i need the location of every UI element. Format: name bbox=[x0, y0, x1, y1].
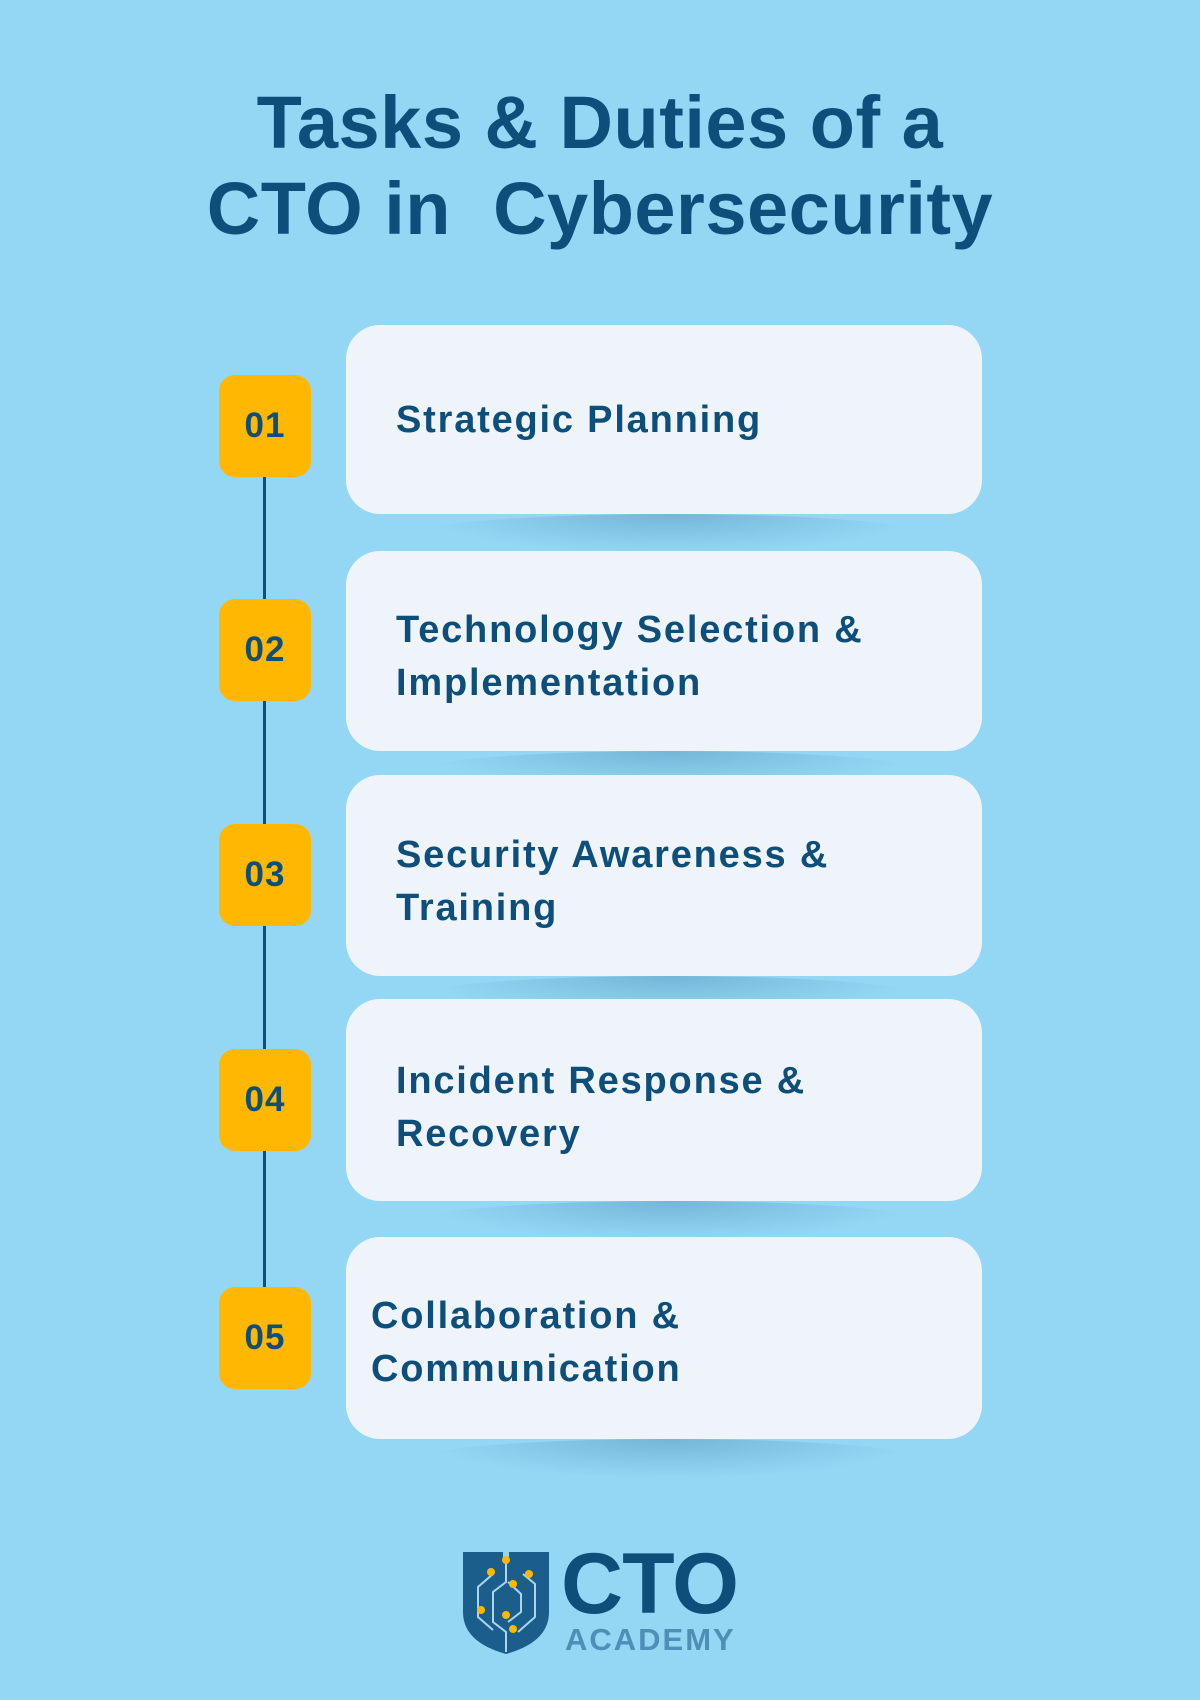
text 4: Recovery bbox=[396, 1113, 582, 1155]
card 4 bbox=[346, 999, 982, 1201]
logo text ACADEMY: ACADEMY bbox=[565, 1622, 736, 1657]
badge 01 bbox=[219, 375, 311, 477]
text 2: Technology Selection & bbox=[396, 609, 864, 651]
badge 05: 05 bbox=[245, 1318, 285, 1357]
text 1: Strategic Planning bbox=[396, 399, 762, 441]
text 5: Communication bbox=[371, 1348, 682, 1390]
badge 05 bbox=[219, 1287, 311, 1389]
badge 02: 02 bbox=[245, 630, 285, 669]
text 3 bbox=[396, 834, 829, 929]
timeline line bbox=[263, 420, 266, 1320]
badge 04 bbox=[219, 1049, 311, 1151]
title: CTO in Cybersecurity bbox=[207, 167, 993, 250]
text 2: Implementation bbox=[396, 662, 702, 704]
text 2 bbox=[396, 609, 864, 704]
logo text CTO: CTO bbox=[561, 1536, 738, 1632]
text 3: Security Awareness & bbox=[396, 834, 829, 876]
badge 01: 01 bbox=[245, 406, 285, 445]
text 5: Collaboration & bbox=[371, 1295, 681, 1337]
badge 02 bbox=[219, 599, 311, 701]
text 5 bbox=[371, 1295, 682, 1390]
logo bbox=[463, 1536, 738, 1657]
title: Tasks & Duties of a bbox=[257, 81, 943, 164]
card 2 bbox=[346, 551, 982, 751]
card 3 bbox=[346, 775, 982, 976]
icon: shield bbox=[463, 1552, 549, 1654]
card 5 bbox=[346, 1237, 982, 1439]
badge 03 bbox=[219, 824, 311, 926]
badge 03: 03 bbox=[245, 855, 285, 894]
text 4 bbox=[396, 1060, 806, 1155]
badge 04: 04 bbox=[245, 1080, 285, 1119]
title bbox=[207, 81, 993, 250]
text 3: Training bbox=[396, 887, 558, 929]
text 4: Incident Response & bbox=[396, 1060, 806, 1102]
card 1 bbox=[346, 325, 982, 514]
